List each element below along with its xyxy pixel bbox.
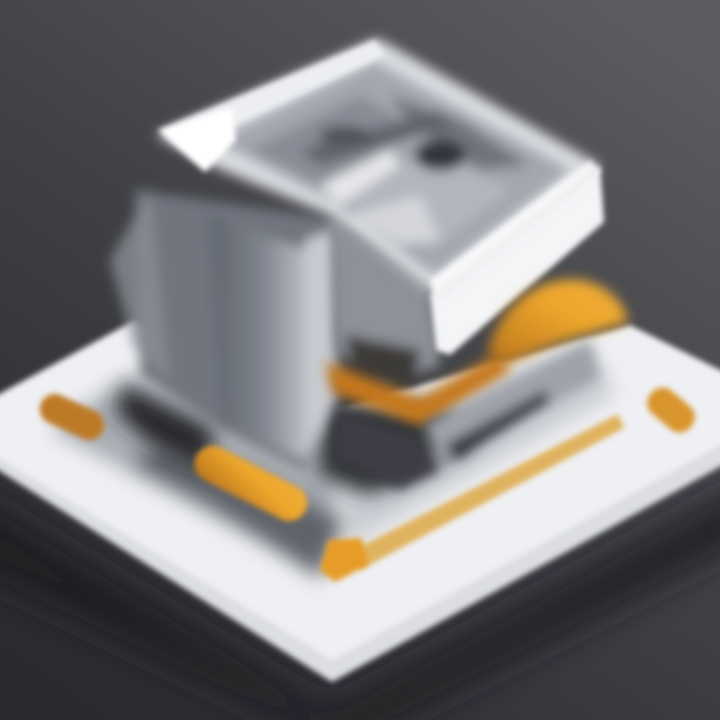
building right white wall	[430, 165, 604, 355]
orange dome	[488, 279, 628, 365]
roof frame	[155, 38, 600, 295]
white platform	[0, 320, 720, 682]
stepped base	[335, 340, 600, 490]
orange line on platform	[350, 414, 624, 570]
building shadow	[115, 385, 470, 495]
orange band	[326, 352, 510, 426]
building right inner face	[330, 215, 440, 385]
orange corner block	[320, 538, 368, 582]
roof opening	[215, 62, 570, 275]
orange pill: centre	[188, 440, 313, 527]
platform shadow	[0, 480, 720, 720]
orange pill: left	[35, 389, 109, 445]
platform shaded floor	[50, 345, 615, 578]
building left face	[110, 190, 340, 470]
orange pill: right	[641, 382, 701, 438]
roof bright edges	[158, 40, 600, 298]
